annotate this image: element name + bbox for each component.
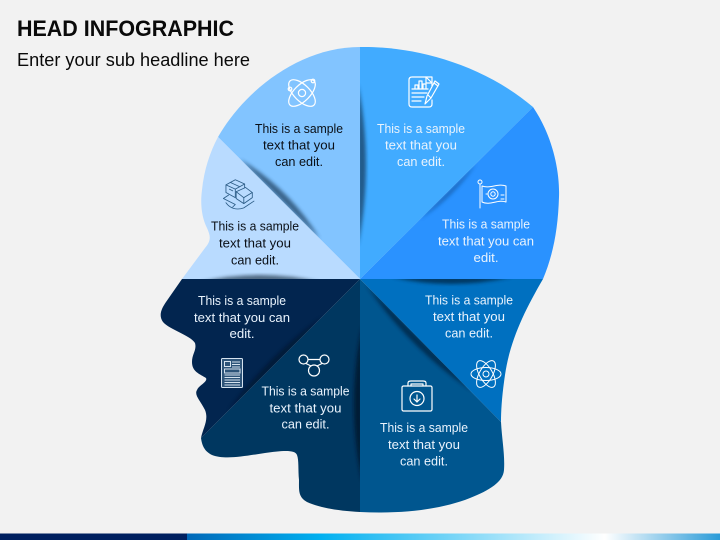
- text block: can edit.: [400, 454, 448, 469]
- icon: bag with download arrow: [402, 381, 432, 411]
- panel: lower-right segment: [360, 277, 543, 422]
- text block: This is a sample: [442, 217, 530, 232]
- text block: can edit.: [282, 417, 330, 432]
- text block: can edit.: [445, 326, 493, 341]
- text block: This is a sample: [380, 420, 468, 435]
- text block: This is a sample: [211, 218, 299, 233]
- segment shape: [201, 279, 360, 512]
- panel: top-right segment: [358, 47, 533, 279]
- text block: can edit.: [397, 154, 445, 169]
- panel: right segment: [360, 107, 559, 279]
- segment shape: [182, 137, 360, 279]
- text block: This is a sample: [262, 383, 350, 398]
- segment shadow: [204, 272, 316, 279]
- segment shadow: [240, 159, 320, 239]
- segment shadow: [234, 324, 314, 404]
- text block: can edit.: [231, 252, 279, 267]
- segment shape: [360, 279, 504, 512]
- segment shadow: [358, 84, 366, 246]
- segment shape: [360, 107, 559, 279]
- text block: text that you can: [438, 234, 534, 248]
- text block: This is a sample: [377, 121, 465, 136]
- segment shape: [218, 47, 360, 279]
- segment shape: [360, 47, 533, 279]
- segment shape: [161, 279, 360, 438]
- panel: chin segment: [201, 279, 362, 512]
- segment shadow: [423, 166, 474, 218]
- title: HEAD INFOGRAPHIC: [17, 16, 234, 41]
- icon: newspaper: [222, 358, 242, 388]
- segment shape: [360, 279, 543, 422]
- icon: connected nodes: [299, 355, 329, 376]
- text block: This is a sample: [198, 293, 286, 308]
- icon: atom: [471, 358, 501, 390]
- text block: text that you can: [194, 310, 290, 325]
- segment shadow: [366, 285, 472, 391]
- text block: text that you: [263, 138, 335, 153]
- panel: upper-left light segment: [182, 137, 360, 282]
- icon: report and pencil: [409, 77, 439, 107]
- icon: flag: [478, 180, 506, 208]
- segment shadow: [352, 332, 360, 476]
- text block: text that you: [385, 138, 457, 153]
- text block: text that you: [433, 309, 505, 324]
- text block: edit.: [230, 326, 254, 341]
- subtitle: Enter your sub headline here: [17, 50, 250, 70]
- text block: This is a sample: [255, 121, 343, 136]
- icon: boxes: [223, 180, 254, 209]
- panel: bottom segment: [360, 279, 504, 512]
- segment shadow: [392, 277, 512, 284]
- text block: text that you: [388, 437, 460, 452]
- text block: edit.: [474, 250, 498, 265]
- footer bar: navy section: [0, 534, 187, 540]
- text block: text that you: [219, 236, 291, 251]
- text block: text that you: [270, 400, 342, 415]
- text block: This is a sample: [425, 292, 513, 307]
- text block: can edit.: [275, 154, 323, 169]
- panel: top-left segment: [218, 47, 360, 279]
- panel: face segment: [161, 279, 360, 438]
- icon: atom: [284, 75, 320, 111]
- footer bar: gradient section: [187, 534, 720, 540]
